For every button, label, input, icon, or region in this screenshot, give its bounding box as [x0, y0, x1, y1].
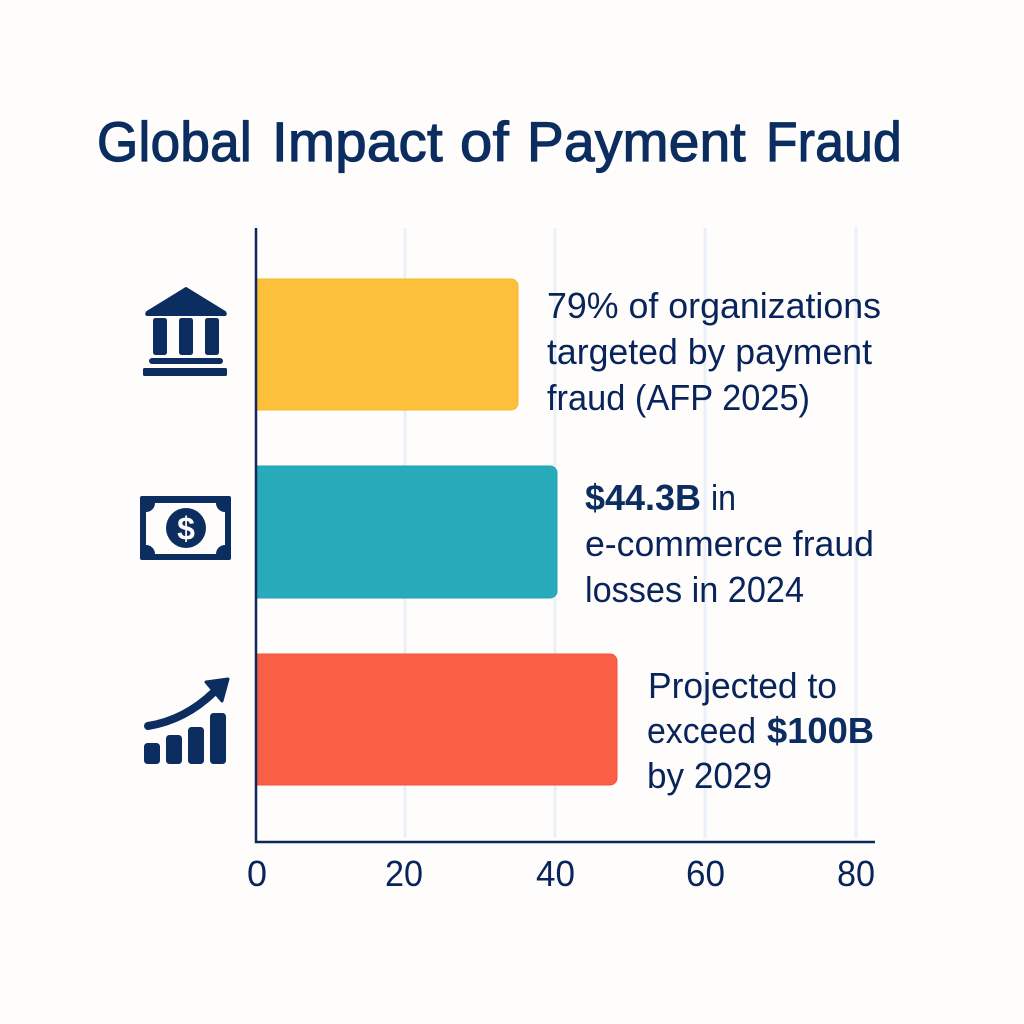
text: $44.3B in e-commerce fraud losses: in: [711, 477, 736, 518]
text: 79% of organizations: 79% of organizations: [547, 285, 881, 326]
text: projected to exceed $100B by 2029: Projected to: [648, 665, 837, 706]
text: projected to exceed $100B by 2029: by 2029: [647, 755, 772, 796]
icon: growth chart with arrow: [144, 679, 228, 764]
icon: dollar banknote: $: [177, 510, 195, 546]
icon: bank: [143, 288, 227, 376]
axis tick labels: 20: [385, 853, 423, 894]
axis tick labels: [247, 853, 875, 894]
text: $44.3B in e-commerce fraud losses: losses in 2024: [585, 569, 804, 610]
text: projected to exceed $100B by 2029: exceed: [647, 710, 756, 751]
title: Payment: [527, 110, 746, 173]
title: Global: [97, 110, 252, 173]
bar: 79% of organizations: [256, 279, 518, 410]
text: 79% of organizations: targeted by payment: [547, 331, 872, 372]
title: Fraud: [766, 110, 902, 173]
text: $44.3B in e-commerce fraud losses: e-commerce fraud: [585, 523, 874, 564]
text: projected to exceed $100B by 2029: [647, 665, 874, 796]
axis tick labels: 60: [686, 853, 725, 894]
icon: dollar banknote: [140, 496, 231, 560]
title: of: [460, 110, 509, 173]
chart axes: [256, 228, 875, 842]
text: $44.3B in e-commerce fraud losses: $44.3B: [585, 477, 701, 518]
axis tick labels: 40: [536, 853, 575, 894]
axis tick labels: 0: [247, 853, 267, 894]
bar: projected $100B: [256, 654, 617, 785]
title: Impact: [272, 110, 443, 173]
text: 79% of organizations: [547, 285, 881, 418]
bar: $44.3B e-commerce fraud: [256, 466, 557, 598]
axis tick labels: 80: [837, 853, 875, 894]
text: 79% of organizations: fraud (AFP 2025): [547, 377, 810, 418]
text: $44.3B in e-commerce fraud losses: [585, 477, 874, 610]
title: [97, 110, 902, 173]
text: projected to exceed $100B by 2029: $100B: [767, 710, 874, 751]
